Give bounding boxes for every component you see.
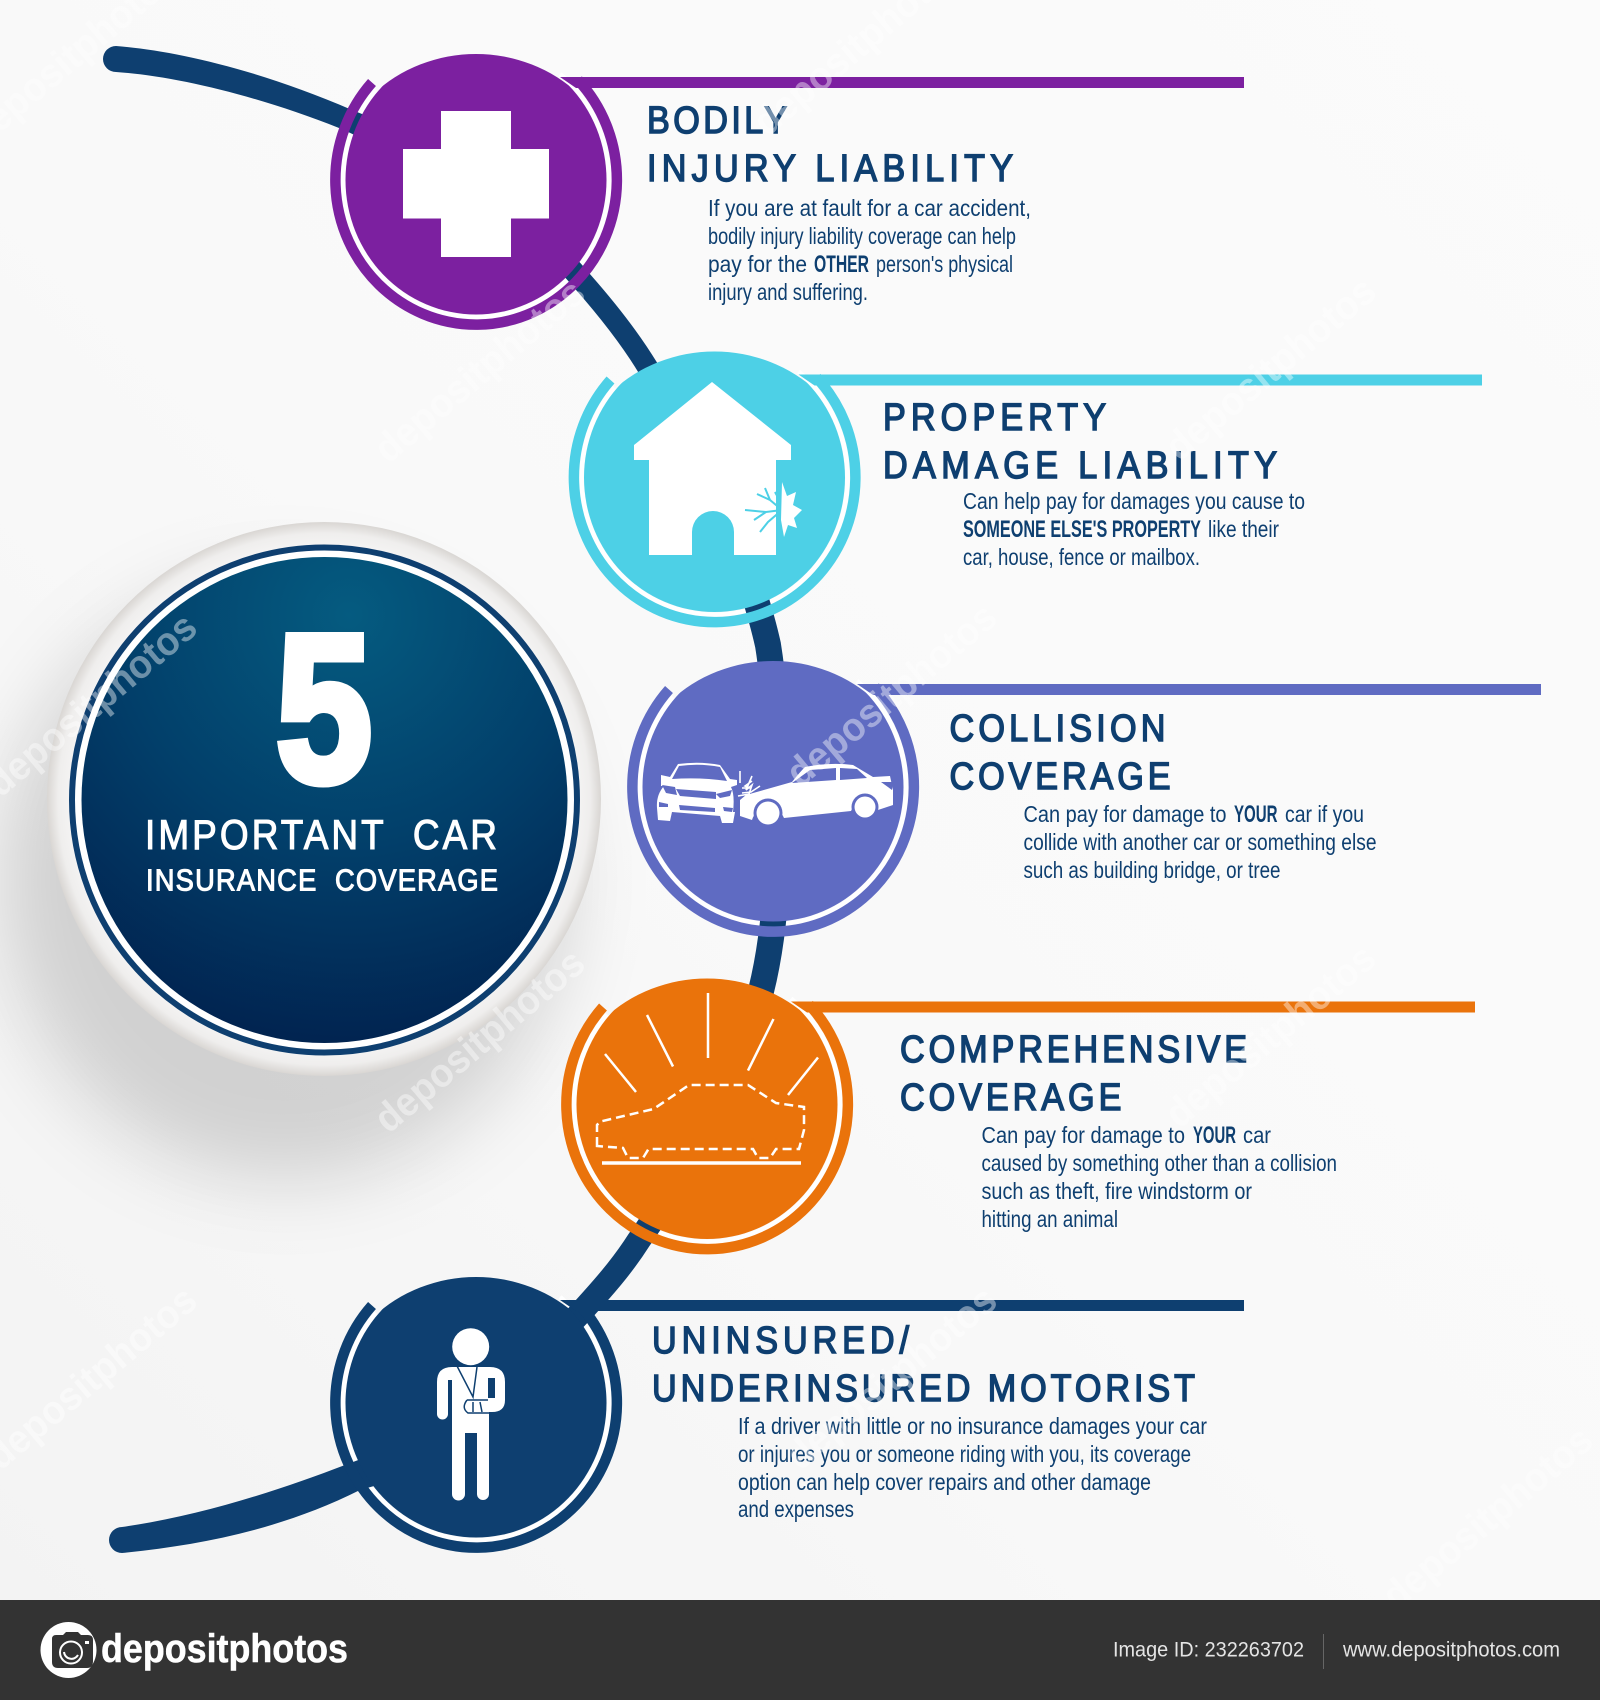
- text block: comprehensive coverage: COVERAGE: [900, 1075, 1121, 1118]
- text block: comprehensive coverage: [900, 1027, 1337, 1232]
- watermarks: depositphotos: [366, 271, 593, 471]
- text block: uninsured underinsured motorist: option can help cover repairs and other damage: [738, 1469, 1151, 1495]
- circle: collision: [642, 652, 904, 922]
- text block: collision coverage: collide with another car or something else: [1024, 829, 1376, 855]
- crescent and bar: navy: [335, 1300, 1244, 1548]
- text block: uninsured underinsured motorist: [652, 1318, 1207, 1522]
- text block: property damage liability: DAMAGE LIABILITY: [883, 443, 1277, 486]
- watermarks: depositphotos: [778, 1278, 1005, 1478]
- text block: comprehensive coverage: YOUR: [1193, 1122, 1236, 1149]
- text block: bodily injury liability: If you are at fault for a car accident,: [708, 195, 1031, 221]
- crescent and bar: purple: [335, 77, 1244, 325]
- footer bar: [0, 1600, 1600, 1700]
- text block: property damage liability: PROPERTY: [883, 395, 1106, 438]
- big number five: 5: [276, 591, 372, 826]
- text block: collision coverage: Can pay for damage to: [1024, 801, 1226, 827]
- circle: property damage: [584, 343, 845, 612]
- text block: bodily injury liability: BODILY: [647, 98, 787, 141]
- text block: bodily injury liability: [647, 98, 1031, 305]
- text block: bodily injury liability: injury and suffering.: [708, 279, 868, 305]
- footer logo wordmark: depositphotos: [101, 1627, 348, 1671]
- footer website: www.depositphotos.com: [1342, 1638, 1560, 1662]
- icon: car under rays: [597, 993, 818, 1163]
- badge heading line two: INSURANCE COVERAGE: [146, 864, 498, 898]
- text block: property damage liability: SOMEONE ELSE'S PROPERTY: [963, 516, 1201, 543]
- text block: collision coverage: car if you: [1285, 801, 1364, 827]
- white rings of the five circles: [343, 74, 906, 1540]
- text block: collision coverage: [950, 706, 1376, 883]
- crescent and bar: orange: [566, 1002, 1475, 1249]
- text block: uninsured underinsured motorist: or injures you or someone riding with you, its coverage: [738, 1441, 1191, 1467]
- text block: collision coverage: COLLISION: [950, 706, 1166, 749]
- text block: bodily injury liability: INJURY LIABILITY: [647, 146, 1013, 189]
- circle: bodily injury: [346, 46, 606, 314]
- connecting curve: [103, 46, 778, 1553]
- text block: bodily injury liability: person's physical: [876, 251, 1013, 277]
- crescent and bar: periwinkle: [632, 684, 1541, 932]
- text block: uninsured underinsured motorist: UNDERINSURED MOTORIST: [652, 1366, 1195, 1409]
- text block: comprehensive coverage: hitting an animal: [982, 1206, 1118, 1232]
- text block: comprehensive coverage: such as theft, fire windstorm or: [982, 1178, 1252, 1204]
- text block: uninsured underinsured motorist: and expenses: [738, 1496, 854, 1522]
- text block: property damage liability: [883, 395, 1305, 570]
- text block: bodily injury liability: bodily injury liability coverage can help: [708, 223, 1016, 249]
- icon: person with arm sling: [437, 1328, 505, 1500]
- footer logo icon: [40, 1622, 96, 1678]
- text block: comprehensive coverage: Can pay for damage to: [982, 1122, 1185, 1148]
- badge heading line one: IMPORTANT CAR: [145, 812, 497, 859]
- main badge: 5 important car insurance coverage: [47, 522, 601, 1076]
- text block: comprehensive coverage: caused by something other than a collision: [982, 1150, 1337, 1176]
- circle: comprehensive: [576, 970, 838, 1239]
- icon: two cars colliding: [657, 763, 893, 828]
- text block: collision coverage: such as building bridge, or tree: [1024, 857, 1280, 883]
- text block: bodily injury liability: pay for the: [708, 251, 807, 277]
- text block: collision coverage: YOUR: [1234, 801, 1278, 828]
- text block: comprehensive coverage: COMPREHENSIVE: [900, 1027, 1247, 1070]
- icon: damaged house: [634, 382, 802, 555]
- text block: property damage liability: Can help pay for damages you cause to: [963, 488, 1305, 514]
- text block: comprehensive coverage: car: [1243, 1122, 1271, 1148]
- icon: medical cross: [403, 111, 549, 257]
- big circle drop shadow: [0, 580, 570, 1180]
- text block: property damage liability: car, house, fence or mailbox.: [963, 544, 1200, 570]
- text block: collision coverage: COVERAGE: [950, 754, 1171, 797]
- footer image id: Image ID: 232263702: [1113, 1638, 1304, 1662]
- text block: uninsured underinsured motorist: If a driver with little or no insurance damages your car: [738, 1413, 1207, 1439]
- watermarks: depositphotos: [366, 941, 593, 1141]
- text block: property damage liability: like their: [1208, 516, 1279, 542]
- watermarks: depositphotos: [778, 595, 1005, 795]
- watermarks: depositphotos: [1157, 936, 1384, 1136]
- circle: uninsured motorist: [346, 1268, 606, 1538]
- crescent and bar: teal: [574, 374, 1482, 622]
- text block: uninsured underinsured motorist: UNINSURED/: [652, 1318, 910, 1361]
- watermarks: depositphotos: [1157, 269, 1384, 469]
- text block: bodily injury liability: OTHER: [814, 251, 869, 278]
